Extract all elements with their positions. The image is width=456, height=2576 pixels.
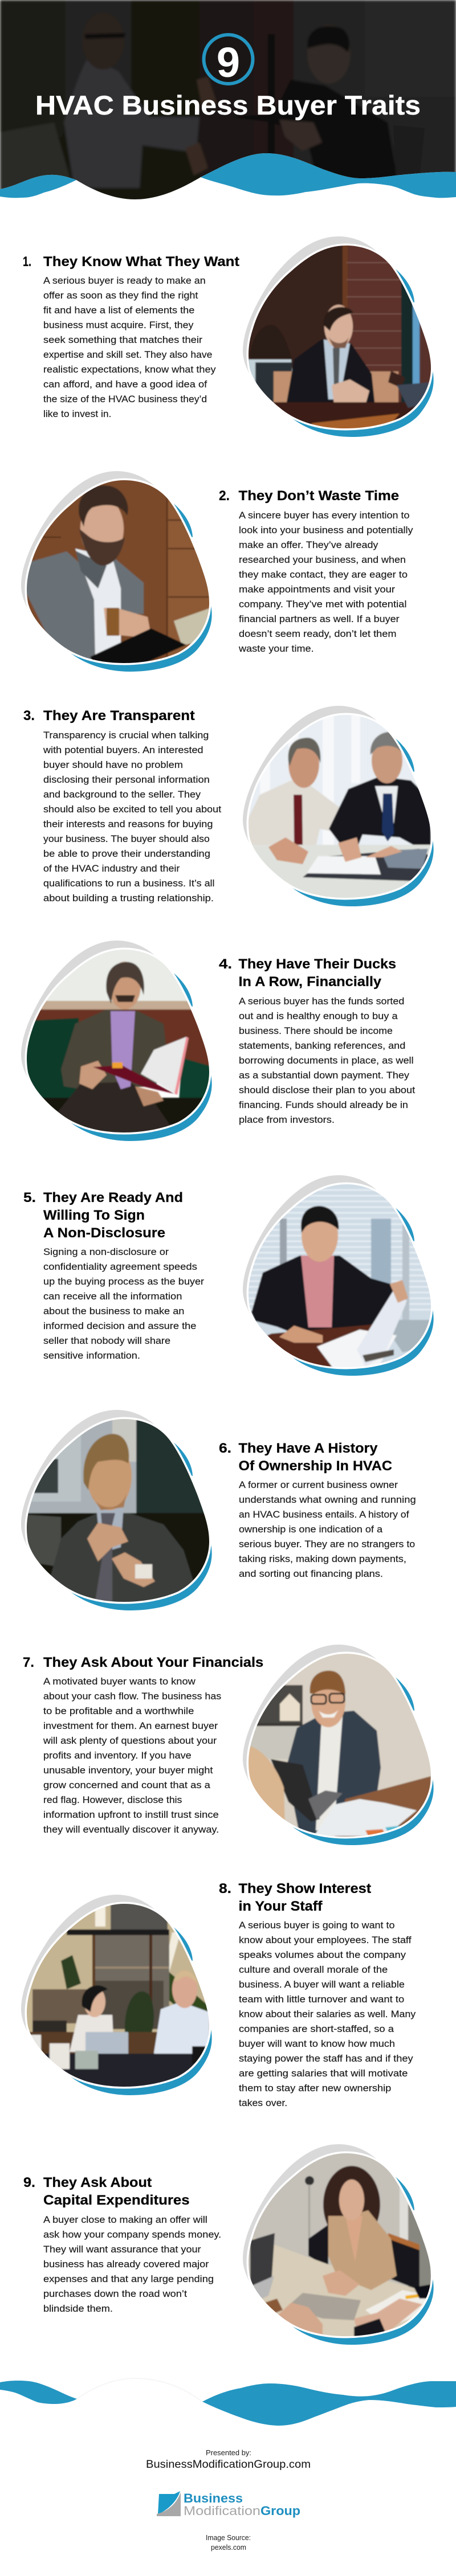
credit: image source: pexels.com xyxy=(211,2543,246,2552)
text block: trait 6: A former or current business owner xyxy=(239,1480,398,1490)
title: HVAC Business Buyer Traits xyxy=(35,90,421,120)
text block: trait 9 xyxy=(43,2215,221,2314)
photo blob: two men signing documents xyxy=(243,706,434,906)
text block: trait 8: A serious buyer is going to want to xyxy=(239,1920,394,1931)
text block: trait 3: should also be excited to tell you about xyxy=(43,804,222,815)
text block: trait 7: information upfront to instill trust since xyxy=(43,1810,219,1820)
heading: trait 2: 2. xyxy=(219,488,230,504)
text block: trait 2: researched your business, and when xyxy=(239,555,406,565)
heading: trait 3: 3. xyxy=(23,708,35,723)
text block: trait 6: an HVAC business entails. A history of xyxy=(239,1510,409,1520)
text block: trait 3: your business. The buyer should also xyxy=(43,834,210,844)
text block: trait 6: taking risks, making down payments, xyxy=(239,1554,406,1564)
text block: trait 9: ask how your company spends money. xyxy=(43,2230,221,2240)
text block: trait 1: like to invest in. xyxy=(43,409,111,419)
text block: trait 5: about the business to make an xyxy=(43,1306,184,1316)
logo: Business Modification Group xyxy=(157,2491,300,2518)
text block: trait 5: confidentiality agreement speeds xyxy=(43,1262,197,1272)
text block: trait 5: sensitive information. xyxy=(43,1351,140,1361)
photo blob: man checking watch xyxy=(21,471,212,672)
heading: trait 8: in Your Staff xyxy=(238,1899,323,1914)
text block: trait 8: companies are short-staffed, so a xyxy=(239,2024,394,2034)
text block: trait 9: expenses and that any large pending xyxy=(43,2274,214,2284)
credit: presented by: Presented by: xyxy=(206,2448,251,2457)
photo blob: smiling man at a laptop xyxy=(243,1645,434,1845)
heading: trait 5: Willing To Sign xyxy=(43,1208,145,1223)
text block: trait 6: understands what owning and running xyxy=(239,1495,416,1505)
panel: trait 3 xyxy=(23,706,434,906)
logo: Business Modification Group: Business xyxy=(184,2491,243,2505)
text block: trait 2: doesn’t seem ready, don’t let them xyxy=(239,629,397,639)
text block: trait 3: of the HVAC industry and their xyxy=(43,864,180,874)
text block: trait 8: buyer will want to know how much xyxy=(239,2039,395,2049)
heading: trait 7: 7. xyxy=(23,1655,34,1670)
text block: trait 3: buyer should have no problem xyxy=(43,760,183,770)
text block: trait 7: profits and inventory. If you have xyxy=(43,1751,192,1761)
text block: trait 8 xyxy=(239,1920,416,2108)
heading: trait 8: 8. xyxy=(219,1881,231,1896)
panel: trait 4 xyxy=(21,941,416,1141)
text block: trait 4: financing. Funds should already be in xyxy=(239,1100,408,1110)
text block: trait 2: look into your business and potentially xyxy=(239,525,413,535)
heading: trait 4: In A Row, Financially xyxy=(238,974,382,989)
text block: trait 7: they will eventually discover it anyway. xyxy=(43,1825,219,1835)
heading: trait 5 xyxy=(23,1190,183,1241)
panel: trait 6 xyxy=(21,1410,416,1610)
text block: trait 8: business. A buyer will want a reliable xyxy=(239,1980,405,1990)
heading: trait 6: They Have A History xyxy=(238,1441,378,1456)
text block: trait 3: qualifications to run a business. It’s all xyxy=(43,878,214,889)
text block: trait 8: culture and overall morale of the xyxy=(239,1965,388,1975)
text block: trait 1: offer as soon as they find the right xyxy=(43,291,198,301)
text block: trait 9: purchases down the road won’t xyxy=(43,2289,187,2299)
panel: trait 9 xyxy=(23,2144,434,2345)
text block: trait 8: them to stay after new ownership xyxy=(239,2083,391,2093)
heading: trait 5: A Non-Disclosure xyxy=(43,1225,165,1241)
credit: image source: Image Source: xyxy=(206,2533,251,2542)
text block: trait 7: unusable inventory, your buyer might xyxy=(43,1765,213,1776)
panel: trait 8 xyxy=(21,1881,416,2108)
heading: trait 6: Of Ownership In HVAC xyxy=(238,1458,392,1474)
text block: trait 6: ownership is one indication of a xyxy=(239,1524,383,1535)
panel: trait 7 xyxy=(23,1645,434,1845)
heading: trait 9 xyxy=(23,2175,190,2208)
heading: trait 5: 5. xyxy=(23,1190,36,1205)
text block: trait 2: company. They’ve met with potential xyxy=(239,599,406,610)
text block: trait 4: out and is healthy enough to buy a xyxy=(239,1011,398,1021)
badge: number 9 xyxy=(204,35,253,86)
heading: trait 1: They Know What They Want xyxy=(43,254,239,269)
text block: trait 3: about building a trusting relationship. xyxy=(43,893,214,903)
text block: trait 2: they make contact, they are eager to xyxy=(239,570,408,580)
text block: trait 1: A serious buyer is ready to make an xyxy=(43,276,206,286)
text block: trait 4: business. There should be income xyxy=(239,1026,393,1036)
heading: trait 2: They Don’t Waste Time xyxy=(238,488,399,504)
text block: trait 2: make an offer. They’ve already xyxy=(239,540,378,550)
text block: trait 4 xyxy=(239,996,416,1125)
text block: trait 3: their interests and reasons for buying xyxy=(43,819,213,829)
panel: trait 1 xyxy=(23,236,434,437)
heading: trait 3: They Are Transparent xyxy=(43,708,195,723)
header photo background xyxy=(0,0,456,205)
text block: trait 1: business must acquire. First, they xyxy=(43,320,194,330)
credit: website: BusinessModificationGroup.com xyxy=(146,2459,311,2471)
text block: trait 3: Transparency is crucial when talking xyxy=(43,730,209,741)
text block: trait 3: and background to the seller. They xyxy=(43,790,201,800)
text block: trait 2: A sincere buyer has every intention to xyxy=(239,510,409,521)
text block: trait 5: up the buying process as the buyer xyxy=(43,1277,205,1287)
footer wave xyxy=(0,2378,456,2426)
credit: image source xyxy=(206,2533,251,2552)
heading: trait 8: They Show Interest xyxy=(238,1881,371,1896)
text block: trait 8: know about their salaries as well. Many xyxy=(239,2009,416,2019)
text block: trait 6: serious buyer. They are no strangers to xyxy=(239,1539,415,1549)
text block: trait 5: informed decision and assure the xyxy=(43,1321,196,1331)
text block: trait 6 xyxy=(239,1480,416,1579)
photo blob: man in suit at a table xyxy=(243,236,434,437)
heading: trait 4 xyxy=(219,956,396,989)
text block: trait 7: red flag. However, disclose this xyxy=(43,1795,182,1805)
text block: trait 1: realistic expectations, know what they xyxy=(43,365,216,375)
text block: trait 5 xyxy=(43,1247,205,1361)
heading: trait 9: 9. xyxy=(23,2175,35,2190)
header wave: blue xyxy=(0,153,456,198)
text block: trait 2 xyxy=(238,510,413,654)
text block: trait 3: disclosing their personal information xyxy=(43,775,210,785)
heading: trait 8 xyxy=(219,1881,371,1914)
heading: trait 9: Capital Expenditures xyxy=(43,2193,190,2208)
text block: trait 2: make appointments and visit your xyxy=(239,584,396,595)
photo blob: woman at a meeting table xyxy=(243,2144,434,2345)
header white cut-out below the photo xyxy=(0,153,456,211)
badge: number 9: 9 xyxy=(217,39,240,86)
panel: trait 5 xyxy=(23,1175,434,1376)
text block: trait 3: be able to prove their understanding xyxy=(43,849,210,859)
text block: trait 5: can receive all the information xyxy=(43,1291,182,1302)
heading: trait 4: They Have Their Ducks xyxy=(238,956,396,972)
text block: trait 1: seek something that matches their xyxy=(43,335,203,345)
text block: trait 7: about your cash flow. The business has xyxy=(43,1691,221,1702)
text block: trait 1: can afford, and have a good idea of xyxy=(43,379,207,390)
text block: trait 1 xyxy=(43,276,216,419)
panel: trait 2 xyxy=(21,471,413,672)
heading: trait 6: 6. xyxy=(219,1441,231,1456)
text block: trait 5: Signing a non-disclosure or xyxy=(43,1247,169,1257)
text block: trait 4: should disclose their plan to you about xyxy=(239,1085,416,1095)
heading: trait 6 xyxy=(219,1441,392,1474)
logo: Business Modification Group: Modification xyxy=(184,2504,260,2518)
heading: trait 1: 1. xyxy=(23,254,31,269)
photo blob: man reading a red folder on a green sofa xyxy=(21,941,212,1141)
text block: trait 4: place from investors. xyxy=(239,1115,335,1125)
text block: trait 7: grow concerned and count that as a xyxy=(43,1780,211,1790)
text block: trait 4: statements, banking references, and xyxy=(239,1041,405,1051)
photo blob: man adjusting his tie xyxy=(21,1410,212,1610)
text block: trait 2: financial partners as well. If a buyer xyxy=(239,614,400,624)
text block: trait 9: business has already covered major xyxy=(43,2259,209,2270)
heading: trait 7: They Ask About Your Financials xyxy=(43,1655,263,1670)
text block: trait 7: to be profitable and a worthwhile xyxy=(43,1706,194,1716)
photo blob: two colleagues talking in a cafe xyxy=(21,1895,212,2095)
text block: trait 8: team with little turnover and want to xyxy=(239,1994,404,2005)
text block: trait 9: A buyer close to making an offer will xyxy=(43,2215,207,2225)
text block: trait 7: A motivated buyer wants to know xyxy=(43,1677,196,1687)
text block: trait 8: speaks volumes about the company xyxy=(239,1950,406,1960)
text block: trait 8: know about your employees. The staff xyxy=(239,1935,412,1945)
text block: trait 9: They will want assurance that your xyxy=(43,2244,201,2255)
text block: trait 7: will ask plenty of questions about your xyxy=(43,1736,217,1746)
text block: trait 8: are getting salaries that will motivate xyxy=(239,2068,408,2079)
text block: trait 1: the size of the HVAC business they’d xyxy=(43,394,207,404)
logo: Business Modification Group: Group xyxy=(260,2504,300,2518)
heading: trait 9: They Ask About xyxy=(43,2175,152,2190)
text block: trait 6: and sorting out financing plans. xyxy=(239,1569,383,1579)
text block: trait 4: borrowing documents in place, as well xyxy=(239,1056,414,1066)
text block: trait 3: with potential buyers. An interested xyxy=(43,745,203,755)
heading: trait 4: 4. xyxy=(219,956,232,972)
text block: trait 1: fit and have a list of elements the xyxy=(43,305,194,316)
text block: trait 4: as a substantial down payment. They xyxy=(239,1070,410,1081)
text block: trait 4: A serious buyer has the funds sorted xyxy=(239,996,404,1007)
text block: trait 8: takes over. xyxy=(239,2098,287,2108)
photo blob: man signing a contract xyxy=(243,1175,434,1376)
text block: trait 8: staying power the staff has and if they xyxy=(239,2054,413,2064)
text block: trait 9: blindside them. xyxy=(43,2304,113,2314)
text block: trait 1: expertise and skill set. They also have xyxy=(43,350,212,360)
text block: trait 3 xyxy=(43,730,222,903)
text block: trait 7 xyxy=(43,1677,221,1835)
text block: trait 5: seller that nobody will share xyxy=(43,1336,170,1346)
text block: trait 7: investment for them. An earnest buyer xyxy=(43,1721,218,1731)
heading: trait 5: They Are Ready And xyxy=(43,1190,183,1205)
text block: trait 2: waste your time. xyxy=(238,644,314,654)
